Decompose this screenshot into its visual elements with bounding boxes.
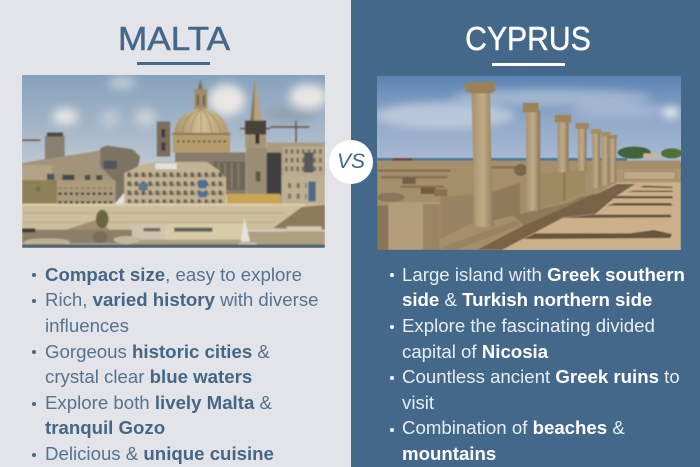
badge: VS — [329, 140, 373, 184]
list: Cyprus highlights: Countless ancient Greek ruins to — [402, 366, 680, 387]
bell tower — [157, 122, 170, 157]
crane — [22, 121, 309, 143]
column 4 — [577, 127, 586, 170]
list: Cyprus highlights: Large island with Greek southern — [402, 264, 685, 284]
list: Cyprus highlights: capital of Nicosia — [402, 340, 548, 362]
trees and house — [617, 146, 650, 158]
sky — [376, 76, 680, 162]
column 7 — [609, 137, 616, 182]
list: Malta highlights: Explore both lively Malta & — [45, 392, 272, 412]
kerbs — [440, 220, 520, 249]
list: Malta highlights: crystal clear blue waters — [45, 366, 252, 387]
column 1 — [471, 92, 494, 226]
bastion wall — [22, 204, 325, 230]
sky — [22, 75, 325, 175]
list: Cyprus highlights: visit — [402, 392, 434, 412]
water — [22, 244, 325, 248]
heading underline — [137, 62, 210, 64]
shoreline buildings — [131, 224, 166, 240]
ground — [376, 160, 680, 250]
panel: Malta — [0, 0, 351, 467]
dome drum — [173, 134, 230, 153]
foreground blocks — [440, 194, 473, 238]
right blocks — [267, 143, 325, 206]
sailboat — [241, 218, 250, 242]
list: Malta highlights: influences — [45, 314, 129, 336]
list: Cyprus highlights: mountains — [402, 443, 496, 464]
dome — [174, 109, 228, 134]
heading: Malta: MALTA — [118, 20, 230, 58]
badge: VS: VS — [337, 150, 365, 173]
far wall — [615, 168, 680, 182]
column 2 — [526, 110, 540, 210]
spire tower — [250, 78, 262, 121]
yellow strip — [227, 194, 280, 204]
list: Malta highlights: tranquil Gozo — [45, 417, 165, 438]
heading underline — [492, 63, 565, 66]
column shadows — [523, 185, 672, 238]
left low building — [22, 180, 115, 204]
upper left buildings — [22, 150, 136, 181]
heading: Cyprus: CYPRUS — [465, 20, 591, 58]
column 3 — [557, 120, 568, 172]
list: Malta highlights: Compact size, easy to explore — [45, 264, 302, 284]
dome lantern — [198, 79, 203, 89]
left tower — [45, 136, 65, 159]
list: Malta highlights: Gorgeous historic cities & — [45, 340, 270, 362]
list: Malta highlights — [32, 264, 319, 464]
red building — [392, 158, 412, 165]
panel: Cyprus — [351, 0, 700, 467]
church body — [175, 153, 246, 195]
column 5 — [592, 133, 600, 188]
list: Cyprus highlights — [390, 264, 685, 464]
list: Cyprus highlights: Combination of beaches & — [402, 417, 625, 438]
wall shadow — [476, 184, 635, 250]
horizon — [376, 158, 627, 160]
photo: Valletta skyline — [22, 75, 325, 248]
list: Cyprus highlights: side & Turkish northern side — [402, 289, 652, 310]
colonnade walls — [491, 182, 520, 220]
rocks — [22, 230, 132, 244]
tree — [96, 210, 109, 228]
sand walkway — [476, 182, 680, 250]
list: Malta highlights: Rich, varied history with diverse — [45, 289, 319, 310]
column 6 — [601, 135, 609, 185]
front building — [124, 162, 226, 204]
list: Cyprus highlights: Explore the fascinating divided — [402, 314, 655, 336]
list: Malta highlights: Delicious & unique cuisine — [45, 443, 274, 464]
photo: Paphos ruins — [377, 76, 681, 250]
